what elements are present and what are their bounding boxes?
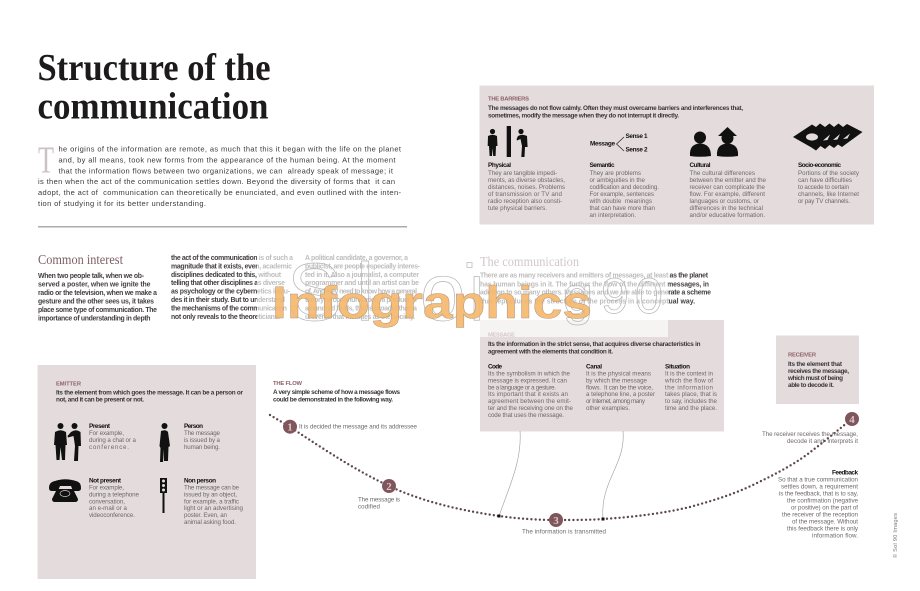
intro text block: and, by all means, took new forms from the appearance of the human being. At the moment: [58, 155, 396, 164]
watermark: l: [356, 247, 374, 338]
heading: the communication: The communication: [480, 254, 579, 269]
code text: Its important that it exists an: [488, 391, 569, 398]
common interest column 3: of. And they need to know how a general: [305, 289, 417, 296]
cultural text: between the emitter and the: [690, 177, 767, 184]
common interest column 1: served a poster, when we ignite the: [38, 282, 151, 288]
semantic text: or ambiguities in the: [590, 177, 646, 184]
person text: The message: [184, 430, 221, 437]
socio-economic text: or pay TV channels.: [798, 198, 850, 205]
intro text block: that the information flows between two organizations, we can already speak of message; it: [58, 166, 394, 175]
feedback text: information flow.: [812, 533, 858, 540]
the communication text: addition to so many others. Messages and we are able to generate a scheme: [480, 290, 711, 297]
step 4: The receiver receives the message,: [762, 431, 858, 438]
message lead text: [488, 341, 701, 356]
physical text: distances, noises. Problems: [488, 184, 565, 191]
the flow heading and lead: [273, 381, 400, 403]
situation text: the information: [665, 384, 714, 391]
barriers heading: THE BARRIERS: [488, 97, 529, 103]
step 2: The message is: [358, 497, 400, 504]
title: [38, 47, 270, 128]
common interest column 2: disciplines dedicated to this, without: [171, 272, 282, 279]
panel: receiver: which must of being: [787, 375, 843, 382]
icon: message with two senses: Sense 1: [626, 133, 648, 140]
common interest column 2: magnitude that it exists, even, academic: [171, 263, 292, 270]
the flow heading and lead: A very simple scheme of how a message flows: [273, 389, 400, 396]
panel: receiver: Its the element that: [788, 361, 843, 368]
socio-economic text: [798, 162, 860, 205]
feedback text: So that a true communication: [778, 477, 859, 484]
the communication text: that reproduces the structure of the process in a conceptual way.: [480, 298, 695, 305]
the communication text: There are as many receivers and emitters of messages, at least as the planet: [480, 273, 709, 280]
semantic text: They are problems: [590, 170, 641, 177]
emitter lead text: not, and it can be present or not.: [56, 396, 144, 404]
intro text block: T: [38, 140, 54, 182]
cultural text: [690, 162, 767, 219]
non person text: [184, 478, 244, 526]
physical text: radio reception also consti-: [488, 198, 562, 205]
step 3: 3: [553, 515, 559, 527]
present text: during a chat or a: [89, 437, 137, 444]
not present text: conversation,: [89, 498, 125, 505]
common interest column 3: a hundred fields, that is broader than a: [305, 305, 417, 312]
feedback text: of the message. Without: [792, 519, 858, 526]
non person text: issued by an object,: [184, 492, 237, 499]
icon: message with two senses: Sense 2: [626, 146, 648, 154]
present text: conference.: [89, 444, 129, 451]
message lead text: agreement with the elements that condition it.: [488, 348, 613, 356]
not present text: [89, 478, 140, 519]
panel: receiver: receives the message,: [788, 368, 849, 375]
semantic text: [588, 162, 659, 219]
cultural text: flow. For example, different: [690, 191, 765, 198]
physical text: of transmission or TV and: [488, 191, 563, 198]
situation text: Situation: [665, 363, 690, 370]
socio-economic text: to accede to certain: [798, 184, 850, 191]
feedback text: the receiver of the reception: [782, 512, 859, 519]
cultural text: differences in the technical: [690, 205, 763, 212]
watermark: [272, 247, 663, 338]
the communication text: [480, 273, 711, 305]
code text: [488, 363, 574, 419]
common interest column 2: as psychology or the cybernetics inclu-: [171, 289, 291, 296]
title: communication: [38, 86, 268, 128]
watermark: l: [470, 266, 483, 333]
common interest column 3: programmer and until an artist can be: [305, 280, 419, 287]
code text: be a language or a gesture.: [488, 384, 556, 391]
the communication text: has human beings in it. The further the flow of the different messages, in: [480, 281, 709, 288]
non person text: light or an advertising: [184, 505, 244, 512]
person text: Person: [184, 423, 203, 430]
socio-economic text: Socio-economic: [798, 162, 841, 169]
step 4: decode it and interprets it: [787, 438, 858, 445]
step 3: [522, 513, 607, 536]
not present text: during a telephone: [89, 492, 140, 499]
message lead text: Its the information in the strict sense, that acquires diverse characteristics in: [488, 341, 701, 348]
socio-economic text: Portions of the society: [798, 170, 860, 177]
step 1: [283, 420, 418, 434]
step 1: 1: [287, 422, 293, 434]
not present text: Not present: [89, 478, 122, 485]
common interest column 1: place some type of communication. The: [38, 307, 157, 314]
panel: receiver: RECEIVER: [788, 353, 817, 359]
common interest column 3: universe that includes all the society.: [305, 314, 415, 321]
flow junction points: [498, 514, 604, 520]
step 2: [358, 479, 400, 511]
watermark: 0: [635, 268, 663, 324]
emitter heading: EMITTER: [56, 381, 82, 387]
intro text block: adopt, the act of communication can theoretically be enunciated, and even outlined with the inten-: [38, 188, 402, 197]
watermark: g: [563, 266, 593, 326]
feedback text: or positive) on the part of: [791, 505, 858, 512]
common interest column 2: telling that other disciplines as diverse: [171, 280, 285, 287]
barriers lead text: [488, 105, 743, 120]
non person text: Non person: [184, 478, 216, 485]
non person text: animal asking food.: [184, 519, 236, 526]
canal text: a telephone line, a poster: [586, 391, 655, 398]
barriers lead text: sometimes, modify the message when they do not interrupt it directly.: [488, 112, 679, 120]
step 4: [762, 412, 859, 445]
common interest column 3: theory of communication, a product of: [305, 297, 418, 304]
present text: [89, 423, 137, 451]
semantic text: Semantic: [590, 162, 615, 169]
socio-economic text: channels, like Internet: [798, 191, 859, 198]
situation text: takes place, that is: [665, 391, 717, 398]
situation text: to say, includes the: [665, 398, 718, 405]
code text: agreement between the emit-: [488, 398, 571, 405]
non person text: poster. Even, an: [184, 512, 228, 519]
step 2: codified: [358, 504, 381, 511]
canal text: or Internet, among many: [586, 398, 646, 405]
common interest column 1: radio or the television, when we make a: [38, 290, 157, 297]
connector lines: [499, 431, 623, 519]
canal text: It is the physical means: [586, 371, 651, 378]
step 1: It is decided the message and its addressee: [299, 424, 418, 431]
code text: ter and the receiving one on the: [488, 405, 574, 412]
icon: banknotes: [793, 124, 862, 150]
the flow heading and lead: could be demonstrated in the following way.: [273, 396, 393, 403]
flow dotted curve: [270, 415, 852, 520]
watermark: 9: [601, 268, 629, 324]
icon: cultural figures: [690, 127, 738, 157]
step 2: 2: [386, 481, 392, 493]
common interest column 1: importance of understanding in depth: [38, 315, 150, 322]
message heading: MESSAGE: [488, 333, 515, 339]
not present text: an e-mail or a: [89, 505, 128, 512]
non person text: The message can be: [184, 485, 240, 492]
common interest column 3: ted in it. Also a journalist, a computer: [305, 272, 419, 279]
feedback text: [778, 470, 859, 540]
physical text: They are tangible impedi-: [488, 170, 557, 177]
cultural text: receiver can complicate the: [690, 184, 766, 191]
watermark: Infographics: [272, 277, 592, 328]
not present text: For example,: [89, 485, 124, 492]
cultural text: languages or customs, or: [690, 198, 759, 205]
common interest column 2: the mechanisms of the communication: [171, 305, 287, 312]
physical text: tute physical barriers.: [488, 205, 547, 212]
physical text: Physical: [488, 162, 511, 169]
canal text: [586, 363, 655, 412]
canal text: by which the message: [586, 378, 648, 384]
intro text block: is then when the act of the communication settles down. Beyond the diversity of forms that it can: [38, 177, 395, 186]
watermark: S: [287, 247, 342, 338]
panel: receiver: [776, 336, 859, 404]
code text: Code: [488, 363, 502, 370]
icon: message with two senses: Message: [590, 140, 615, 148]
common interest column 1: When two people talk, when we ob-: [38, 273, 145, 280]
credit: © Sol 90 Images: [892, 513, 899, 558]
common interest column 2: [171, 255, 293, 321]
code text: message is expressed. It can: [488, 378, 568, 384]
feedback text: Feedback: [832, 470, 858, 477]
socio-economic text: can have difficulties: [798, 177, 852, 184]
common interest column 3: A political candidate, a governor, a: [305, 255, 408, 262]
feedback text: the confirmation (negative: [787, 498, 859, 505]
canal text: other examples.: [586, 405, 630, 412]
cultural text: and/or educative formation.: [690, 212, 765, 219]
common interest column 1: [38, 273, 157, 322]
feedback text: is the feedback, that is to say,: [779, 491, 858, 498]
watermark: o: [420, 247, 466, 338]
semantic text: codification and decoding.: [590, 184, 659, 191]
present text: Present: [89, 423, 111, 430]
semantic text: that can have more than: [590, 205, 656, 212]
person text: [184, 423, 221, 451]
semantic text: For example, sentences: [590, 191, 654, 198]
code text: Its the symbolism in which the: [488, 371, 571, 378]
emitter lead text: [56, 390, 244, 404]
intro text block: tion of studying it for its better understanding.: [38, 199, 206, 208]
common interest column 3: [305, 255, 421, 321]
common interest column 2: the act of the communication is of such a: [171, 255, 293, 262]
canal text: Canal: [586, 363, 602, 370]
cultural text: Cultural: [690, 162, 711, 169]
intro text block: he origins of the information are remote, as much that this it began with the life on the planet: [58, 144, 402, 154]
common interest column 2: des it in their study. But to understand: [171, 297, 285, 304]
panel: emitter: [38, 365, 256, 579]
person text: human being.: [184, 444, 220, 451]
icon: single man: [160, 423, 170, 462]
person text: is issued by a: [184, 437, 221, 444]
semantic text: an interpretation.: [590, 212, 636, 219]
panel: receiver: able to decode it.: [788, 382, 834, 389]
feedback text: this feedback there is only: [787, 526, 859, 533]
common interest column 3: publicist, are people especially interes-: [305, 263, 421, 270]
emitter lead text: Its the element from which goes the message. It can be a person or: [56, 390, 244, 396]
common interest column 1: gesture and the other sees us, it takes: [38, 298, 154, 305]
physical text: [488, 162, 565, 212]
situation text: time and the place.: [665, 405, 717, 412]
icon: physical barrier: [488, 126, 528, 157]
panel: the barriers: [480, 86, 874, 224]
barriers lead text: The messages do not flow calmly. Often they must overcame barriers and interferences that,: [488, 105, 743, 112]
non person text: for example, a traffic: [184, 498, 239, 505]
icon: two men talking: [54, 423, 81, 461]
common interest column 2: not only reveals to the theoreticians.: [171, 314, 280, 321]
situation text: which the flow of: [664, 378, 713, 384]
icon: message with two senses: [590, 133, 648, 154]
situation text: It is the context in: [665, 371, 714, 378]
step 4: 4: [849, 414, 855, 426]
icon: traffic light: [160, 478, 167, 513]
title: Structure of the: [38, 47, 270, 89]
code text: code that uses the message.: [488, 412, 564, 419]
canal text: flows. It can be the voice,: [586, 384, 653, 391]
semantic text: with double meanings: [588, 198, 652, 205]
panel: message: [480, 320, 724, 432]
heading: common interest: Common interest: [38, 252, 123, 267]
intro text block: [38, 140, 402, 208]
situation text: [664, 363, 718, 412]
step 3: The information is transmitted: [522, 528, 607, 536]
icon: telephone: [49, 479, 81, 502]
feedback text: settles down, a requirement: [781, 484, 858, 491]
cultural text: The cultural differences: [690, 170, 755, 177]
the flow heading and lead: THE FLOW: [273, 381, 303, 387]
physical text: ments, as diverse obstacles,: [488, 177, 565, 184]
present text: For example,: [89, 430, 124, 437]
not present text: videoconference.: [89, 512, 135, 519]
